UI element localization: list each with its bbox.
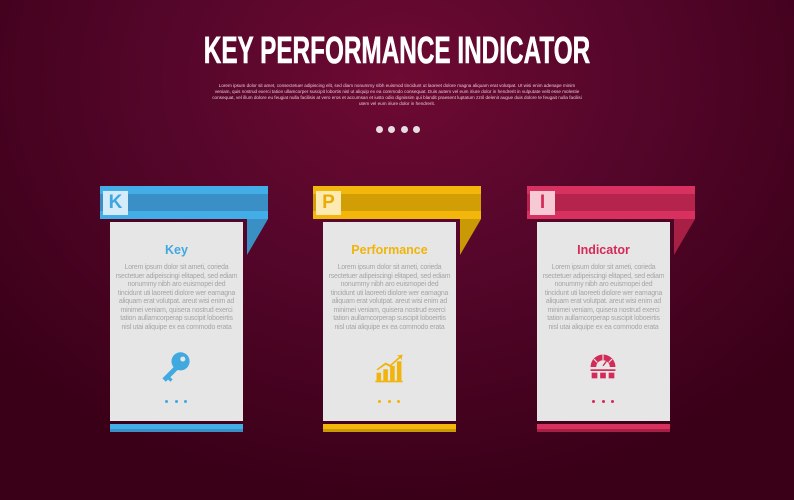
page dots: [376, 126, 420, 133]
panel content: [537, 222, 670, 421]
card: Performance: [313, 186, 481, 432]
panel content: [323, 222, 456, 421]
heading: Indicator: [577, 243, 630, 257]
icon: chart: [375, 354, 403, 382]
dots: [378, 400, 400, 403]
bottom bar: [323, 424, 456, 432]
panel content: [110, 222, 243, 421]
letter K: K: [109, 192, 122, 213]
fold: [674, 219, 695, 255]
icon: key: [162, 352, 190, 382]
letter K: [103, 191, 128, 215]
header band P: [313, 186, 481, 219]
heading: Key: [165, 243, 188, 257]
dots: [165, 400, 187, 403]
body text: Lorem ipsum dolor sit ameti, corieda rsectetuer adipeiscingi elitaped, sed ediam nonummy nibh aro euismopei ded tincidunt uti laoreeti diolore wer eamagna aliquam erat volutpat. areut wisi enim ad minimei veniam, quisera nostrud exerci tation aullamcorperap suscipit loboeirtis nisl utai aliquipe ex ea commodo erata: [329, 264, 450, 330]
title: KEY PERFORMANCE INDICATOR: [204, 30, 590, 72]
body text: Lorem ipsum dolor sit ameti, corieda rsectetuer adipeiscingi elitaped, sed ediam nonummy nibh aro euismopei ded tincidunt uti laoreeti diolore wer eamagna aliquam erat volutpat. areut wisi enim ad minimei veniam, quisera nostrud exerci tation aullamcorperap suscipit loboeirtis nisl utai aliquipe ex ea commodo erata: [543, 264, 664, 330]
card: Key: [100, 186, 268, 432]
letter I: [530, 191, 555, 215]
fold: [460, 219, 481, 255]
header band K: [100, 186, 268, 219]
dots: [592, 400, 614, 403]
header band I: [527, 186, 695, 219]
bottom bar: [537, 424, 670, 432]
fold: [247, 219, 268, 255]
letter P: [316, 191, 341, 215]
subtitle text: Lorem ipsum dolor sit amet, consectetuer adipiscing elit, sed diam nonummy nibh euismod tincidunt ut laoreet dolore magna aliquam erat volutpat. Ut wisi enim adenape minim veniam, quis nostrud exerci tation ullamcorper suscipit lobortis nisl ut aliquip ex ea commodo consequat. Duis autem vel eum iriure dolor in hendrerit in vulputate velit esse molestie consequat, vel illum dolore eu feugiat nulla facilisis at vero eros et accumsan et iusto odio dignissim qui blandit praesent luptatum zzril delenit augue duis dolore te feugait nulla facilisi utem vel eum iriure dolor in hendrerit.: [212, 83, 582, 106]
letter I: I: [540, 192, 545, 213]
icon: gauge: [590, 354, 616, 378]
letter P: P: [322, 192, 335, 213]
card: Indicator: [527, 186, 695, 432]
bottom bar: [110, 424, 243, 432]
body text: Lorem ipsum dolor sit ameti, corieda rsectetuer adipeiscingi elitaped, sed ediam nonummy nibh aro euismopei ded tincidunt uti laoreeti diolore wer eamagna aliquam erat volutpat. areut wisi enim ad minimei veniam, quisera nostrud exerci tation aullamcorperap suscipit loboeirtis nisl utai aliquipe ex ea commodo erata: [116, 264, 237, 330]
heading: Performance: [351, 243, 428, 257]
